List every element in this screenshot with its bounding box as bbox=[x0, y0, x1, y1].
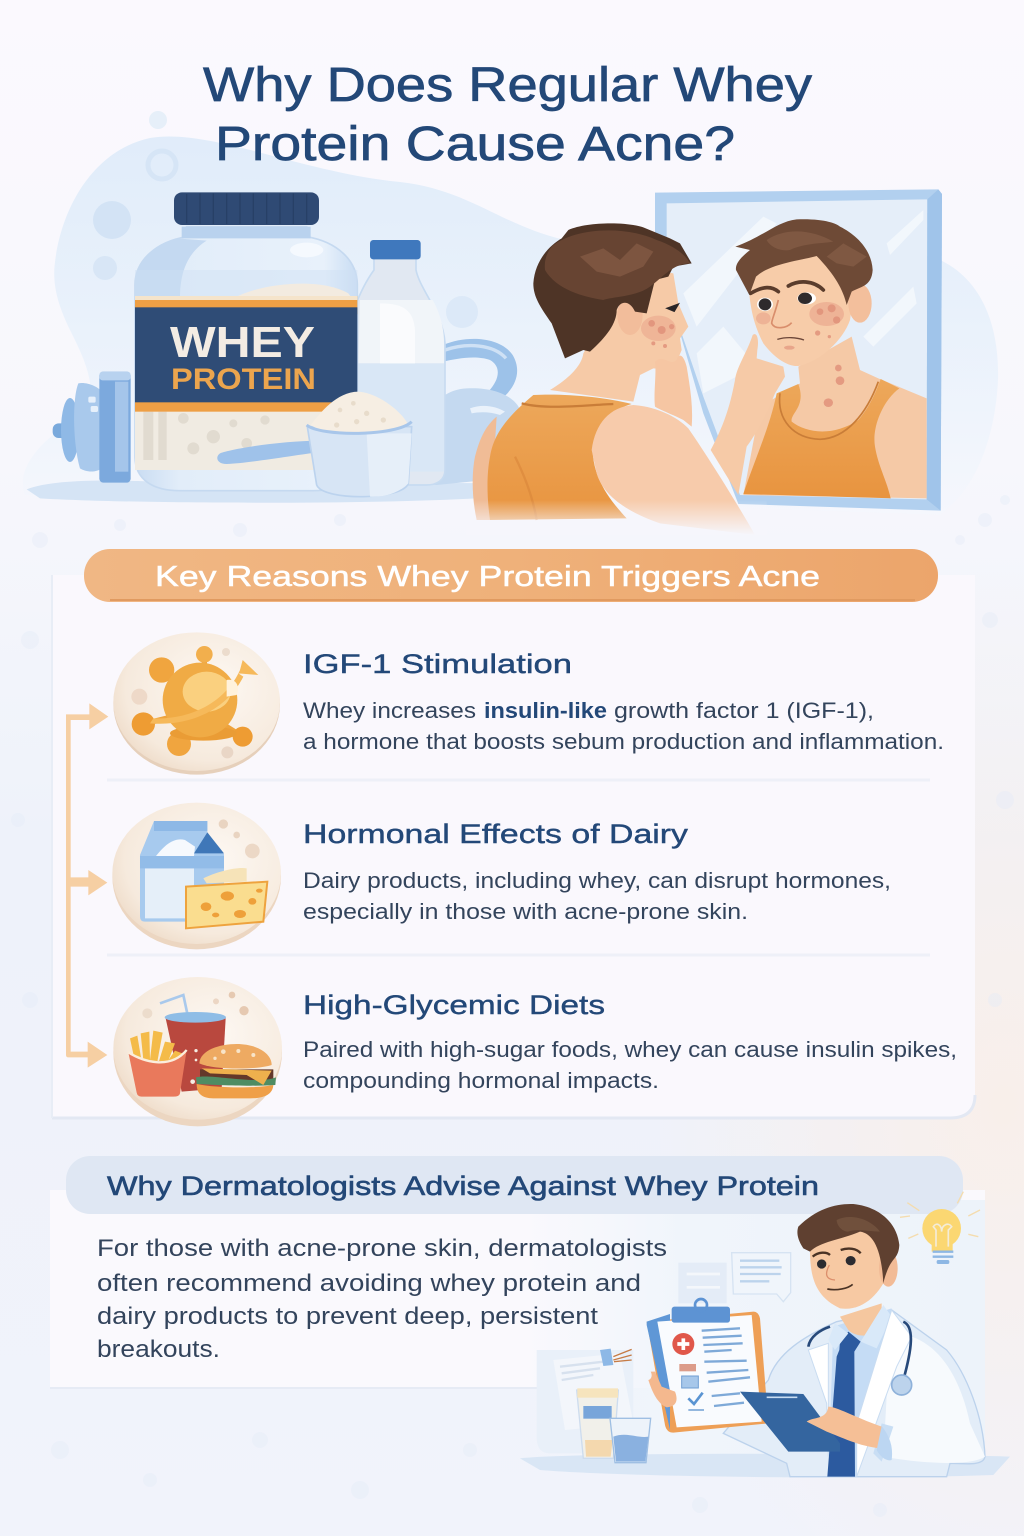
jar label text: WHEY bbox=[170, 318, 315, 367]
illustration: whey products bbox=[27, 192, 520, 503]
clipboard bbox=[647, 1299, 768, 1433]
text block: hormonal effects of dairy: Hormonal Effects of Dairy bbox=[303, 819, 689, 849]
text block: IGF-1 stimulation: Whey increases bbox=[303, 698, 476, 723]
arrows connector bbox=[66, 703, 108, 1068]
doctor body bbox=[723, 1303, 985, 1477]
text block: hormonal effects of dairy: especially in those with acne-prone skin. bbox=[303, 899, 748, 924]
text block: high-glycemic diets: compounding hormonal impacts. bbox=[303, 1068, 659, 1093]
ground shadow bbox=[27, 480, 520, 503]
text block: IGF-1 stimulation: insulin-like bbox=[484, 698, 607, 723]
panel heading band: Why Dermatologists Advise Against Whey Protein bbox=[107, 1171, 819, 1201]
icon: glasses on desk bbox=[577, 1388, 651, 1463]
text block: hormonal effects of dairy: Dairy products, including whey, can disrupt hormones, bbox=[303, 868, 891, 893]
reflection of man bbox=[711, 219, 927, 498]
man seen from behind bbox=[473, 223, 755, 535]
advice paragraph bbox=[97, 1235, 667, 1363]
text block: IGF-1 stimulation: a hormone that boosts sebum production and inflammation. bbox=[303, 729, 944, 754]
icon: dumbbell bbox=[53, 372, 131, 483]
title bbox=[203, 59, 812, 171]
icon: milk bottle bbox=[355, 240, 445, 485]
illustration: doctor with clipboard bbox=[520, 1192, 1010, 1477]
hero background blob bbox=[23, 111, 998, 515]
illustration: man looking in mirror bbox=[467, 189, 942, 535]
panel: dermatologists advice bbox=[50, 1156, 985, 1470]
icon: kettlebell bbox=[413, 339, 520, 485]
jar label text: PROTEIN bbox=[171, 363, 316, 396]
advice paragraph: breakouts. bbox=[97, 1336, 220, 1363]
icon: fast food bbox=[113, 977, 282, 1126]
text block: IGF-1 stimulation: growth factor 1 (IGF-1), bbox=[614, 698, 874, 723]
text block: hormonal effects of dairy bbox=[303, 819, 891, 924]
icon: whey protein jar bbox=[135, 192, 357, 491]
icon: light bulb bbox=[900, 1192, 980, 1264]
text block: high-glycemic diets: High-Glycemic Diets bbox=[303, 990, 605, 1020]
panel heading banner bbox=[84, 549, 938, 602]
desk shadow and background items bbox=[520, 1253, 1010, 1477]
panel heading band bbox=[66, 1156, 963, 1214]
title: Why Does Regular Whey bbox=[203, 59, 812, 112]
text block: IGF-1 stimulation bbox=[303, 649, 944, 754]
icon: milk carton and cheese bbox=[112, 803, 281, 949]
tablet and hand bbox=[740, 1392, 892, 1460]
panel: key reasons card bbox=[52, 549, 975, 1118]
text block: high-glycemic diets bbox=[303, 990, 957, 1093]
text block: IGF-1 stimulation: IGF-1 Stimulation bbox=[303, 649, 572, 679]
mirror bbox=[655, 189, 942, 511]
advice paragraph: For those with acne-prone skin, dermatologists bbox=[97, 1235, 667, 1262]
advice paragraph: often recommend avoiding whey protein and bbox=[97, 1270, 641, 1297]
panel heading banner: Key Reasons Whey Protein Triggers Acne bbox=[155, 561, 820, 593]
icon: protein scoop bbox=[217, 392, 412, 497]
fade at bottom of figure bbox=[467, 500, 767, 535]
jar label text bbox=[170, 318, 316, 396]
icon: IGF-1 molecule bbox=[113, 632, 280, 775]
doctor head bbox=[797, 1204, 899, 1309]
advice paragraph: dairy products to prevent deep, persistent bbox=[97, 1303, 598, 1330]
title: Protein Cause Acne? bbox=[215, 118, 735, 171]
text block: high-glycemic diets: Paired with high-sugar foods, whey can cause insulin spikes, bbox=[303, 1037, 957, 1062]
